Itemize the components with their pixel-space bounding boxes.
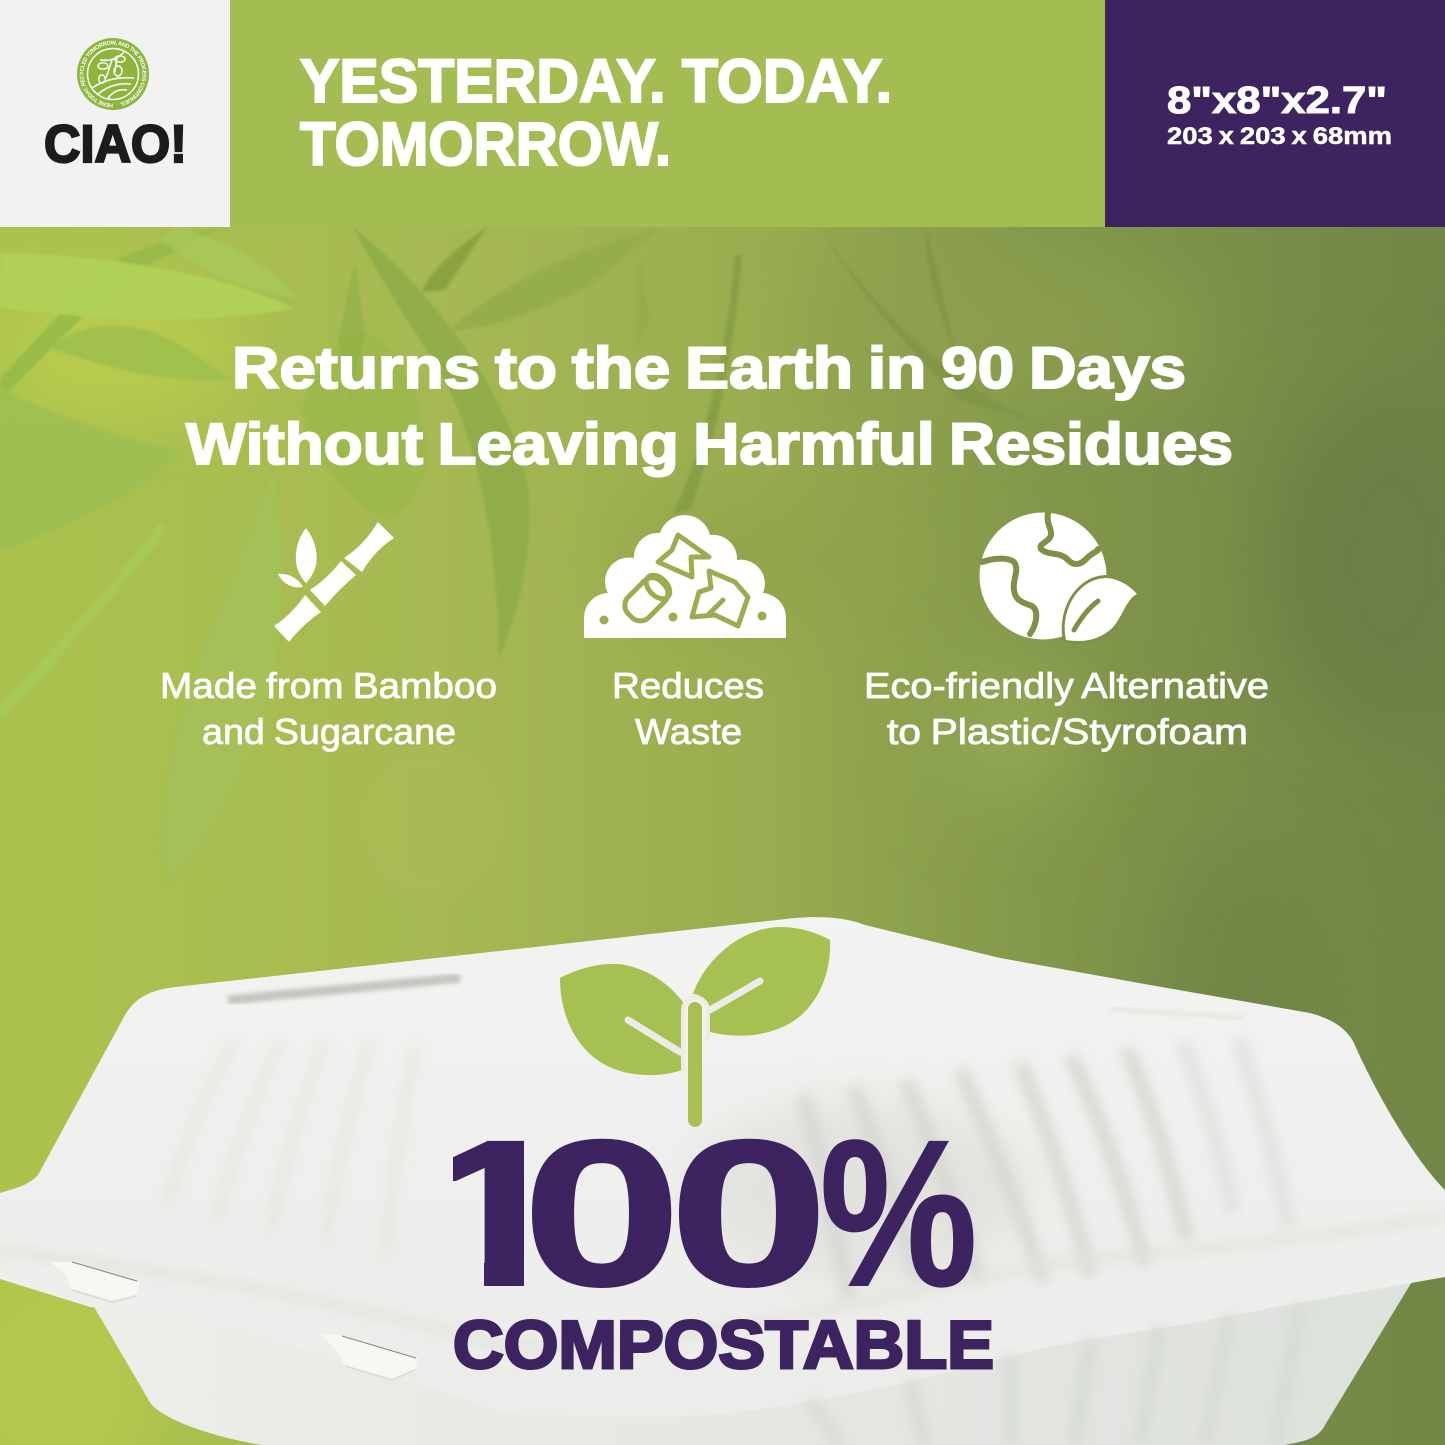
big number: 100%: [453, 1138, 974, 1288]
header: tagline band: TOMORROW.: [300, 110, 671, 178]
lid shading: [690, 1100, 1030, 1280]
latch right: [321, 1334, 418, 1380]
label: compostable: COMPOSTABLE: [453, 1307, 994, 1383]
label: reduces waste: Waste: [635, 711, 742, 752]
header: dimensions panel: 8"x8"x2.7": [1167, 80, 1387, 122]
logo badge: HERE TODAY, RECYCLED TOMORROW, AND THE PROCESS CONTINUES.: [80, 40, 146, 108]
label: bamboo: and Sugarcane: [202, 711, 456, 752]
container tray: [90, 1270, 1445, 1445]
icon: bamboo: [274, 522, 394, 642]
main heading: [186, 336, 1233, 477]
label: eco-friendly alternative: Eco-friendly Alternative: [864, 665, 1269, 706]
big number: 100%: 0: [522, 1097, 682, 1330]
lid ribs: [165, 1039, 1289, 1300]
compostable container photo: [0, 917, 1445, 1445]
label: reduces waste: Reduces: [612, 665, 764, 706]
label: eco-friendly alternative: [864, 665, 1269, 752]
header: logo panel: [0, 0, 230, 227]
header: tagline band: [230, 0, 1105, 227]
icon: earth and leaf: [980, 512, 1137, 641]
main heading: Without Leaving Harmful Residues: [186, 412, 1233, 477]
big number: 100%: 1: [419, 1097, 579, 1330]
container lid: [0, 917, 1445, 1417]
latch left: [50, 1262, 140, 1302]
icon: sprout: [560, 927, 830, 1127]
big number: 100%: %: [820, 1096, 977, 1329]
lid rim shading: [0, 1215, 1445, 1347]
tray ribs: [810, 1305, 1300, 1445]
label: bamboo: [160, 665, 497, 752]
label: reduces waste: [612, 665, 764, 752]
header: tagline band: YESTERDAY. TODAY.: [300, 47, 892, 115]
label: eco-friendly alternative: to Plastic/Styrofoam: [887, 711, 1248, 752]
bamboo leaves behind the heading: [0, 227, 1030, 885]
label: bamboo: Made from Bamboo: [160, 665, 497, 706]
header: dimensions panel: 203 x 203 x 68mm: [1167, 123, 1392, 150]
header: dimensions panel: [1105, 0, 1445, 227]
icon: compost pile: [584, 515, 786, 638]
big number: 100%: 0: [669, 1097, 829, 1330]
logo wordmark: CIAO!: [44, 115, 187, 174]
main heading: Returns to the Earth in 90 Days: [232, 336, 1186, 401]
